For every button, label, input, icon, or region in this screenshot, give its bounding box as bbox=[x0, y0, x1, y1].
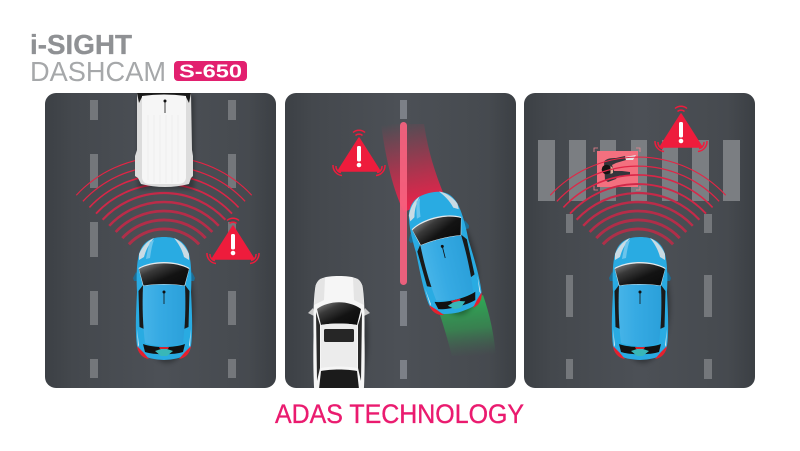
panel: forward collision warning bbox=[45, 93, 276, 388]
warning triangle bbox=[655, 106, 707, 152]
warning triangle bbox=[207, 218, 259, 264]
right lane markings bbox=[228, 100, 236, 378]
warning triangle bbox=[333, 130, 385, 176]
white van bbox=[135, 93, 194, 189]
pedestrian in detection box bbox=[594, 148, 640, 190]
white car bbox=[308, 276, 370, 388]
left lane markings bbox=[90, 100, 98, 378]
badge: S-650: S-650 bbox=[179, 62, 242, 82]
radar arcs bbox=[550, 157, 726, 244]
heading: DASHCAM: DASHCAM bbox=[30, 56, 166, 87]
blue car bbox=[133, 237, 195, 363]
left lane markings bbox=[566, 214, 573, 379]
blue car drifting bbox=[408, 192, 482, 317]
panel: pedestrian warning bbox=[524, 93, 755, 388]
centre lane markings bbox=[400, 100, 407, 379]
panel: lane departure warning bbox=[285, 93, 516, 401]
right lane markings bbox=[704, 214, 712, 379]
zebra crossing bbox=[538, 140, 740, 201]
green safe trail bbox=[440, 295, 496, 356]
blue car bbox=[609, 237, 671, 363]
heading: i-SIGHT: i-SIGHT bbox=[30, 29, 132, 60]
badge: S-650 bbox=[174, 61, 247, 82]
title: i-SIGHT DASHCAM S-650 bbox=[30, 29, 247, 87]
red departure trail bbox=[381, 124, 444, 212]
radar arcs bbox=[76, 157, 252, 244]
highlighted lane line bbox=[400, 122, 407, 285]
caption: ADAS TECHNOLOGY: ADAS TECHNOLOGY bbox=[275, 399, 524, 429]
